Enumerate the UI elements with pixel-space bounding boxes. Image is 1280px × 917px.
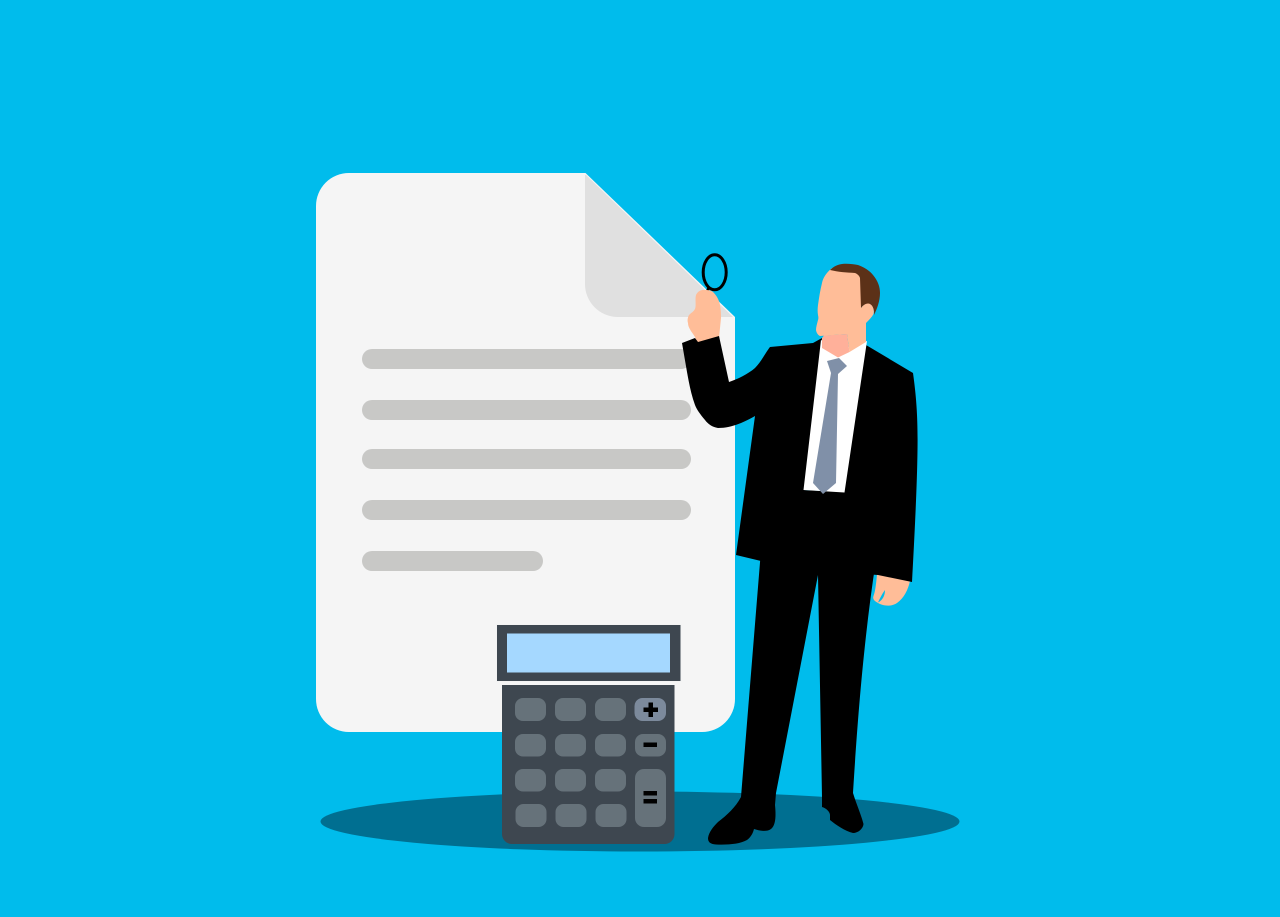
tie — [813, 358, 847, 494]
raised hand — [688, 290, 721, 344]
magnifying glass — [703, 255, 726, 294]
shirt — [804, 340, 867, 492]
plus key — [634, 698, 666, 721]
equals key — [635, 769, 666, 827]
thumb gap — [878, 590, 885, 602]
calculator — [496, 624, 682, 844]
head — [816, 266, 874, 352]
document page — [316, 173, 735, 732]
trousers and shoes — [708, 550, 876, 845]
number keys — [515, 698, 626, 827]
neck — [822, 334, 850, 358]
businessman — [682, 255, 918, 845]
minus key — [635, 734, 666, 756]
hair — [830, 264, 880, 315]
suit jacket — [682, 336, 918, 582]
hanging hand — [873, 574, 910, 606]
folded corner — [585, 175, 733, 317]
text lines placeholder — [362, 349, 691, 571]
document — [316, 173, 735, 732]
calculator display — [496, 624, 682, 682]
ground shadow — [320, 792, 960, 852]
calculator body — [502, 685, 674, 844]
